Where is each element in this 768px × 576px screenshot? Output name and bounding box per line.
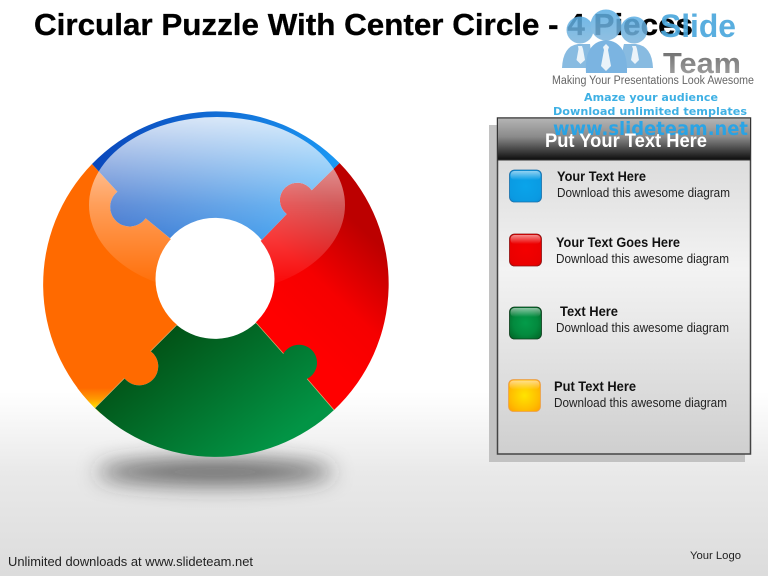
label description: Download this awesome diagram: [556, 252, 729, 266]
icon: three business people: [562, 10, 653, 73]
swatch: orange: [508, 380, 540, 412]
promo line: download: Download unlimited templates: [553, 105, 747, 118]
puzzle piece: blue (top): [92, 111, 340, 240]
logo tagline: Making Your Presentations Look Awesome: [552, 75, 754, 87]
label heading: Your Text Here: [557, 169, 646, 184]
label description: Download this awesome diagram: [557, 186, 730, 200]
label heading: Put Text Here: [554, 379, 636, 394]
panel body: [498, 118, 750, 454]
website url watermark: www.slideteam.net: [553, 118, 748, 140]
logo: Slide Team watermark: [552, 8, 754, 118]
panel header bar: [498, 118, 750, 160]
circular puzzle diagram: [43, 111, 389, 457]
legend item: orange: [508, 379, 727, 412]
swatch: green: [510, 307, 542, 339]
disc ground shadow: [97, 459, 333, 485]
logo wordmark: Slide: Slide: [660, 8, 736, 44]
footer: downloads note: Unlimited downloads at www.slideteam.net: [8, 555, 254, 569]
swatch: red: [510, 234, 542, 266]
center circle: [156, 220, 274, 338]
panel: legend: [489, 118, 750, 462]
label description: Download this awesome diagram: [554, 396, 727, 410]
seam highlight lines: [95, 323, 334, 410]
legend item: red: [510, 234, 729, 266]
legend item: green: [510, 304, 729, 339]
orange piece yellow tip: [78, 388, 112, 414]
panel drop shadow: [489, 125, 745, 462]
logo wordmark: Team: Team: [663, 48, 741, 80]
swatch: blue: [510, 170, 542, 202]
panel heading: Put Your Text Here: [545, 131, 707, 152]
label description: Download this awesome diagram: [556, 321, 729, 335]
legend item: blue: [510, 169, 730, 202]
footer: logo placeholder: Your Logo: [690, 550, 741, 562]
title: Circular Puzzle With Center Circle - 4 Pieces: [34, 8, 693, 42]
promo line: amaze: Amaze your audience: [584, 91, 718, 104]
puzzle piece: red (right): [215, 163, 389, 410]
puzzle piece: orange (left): [43, 164, 215, 408]
label heading: Text Here: [560, 304, 618, 319]
puzzle piece: green (bottom): [95, 323, 334, 457]
glass highlight: [89, 117, 345, 293]
label heading: Your Text Goes Here: [556, 235, 680, 250]
